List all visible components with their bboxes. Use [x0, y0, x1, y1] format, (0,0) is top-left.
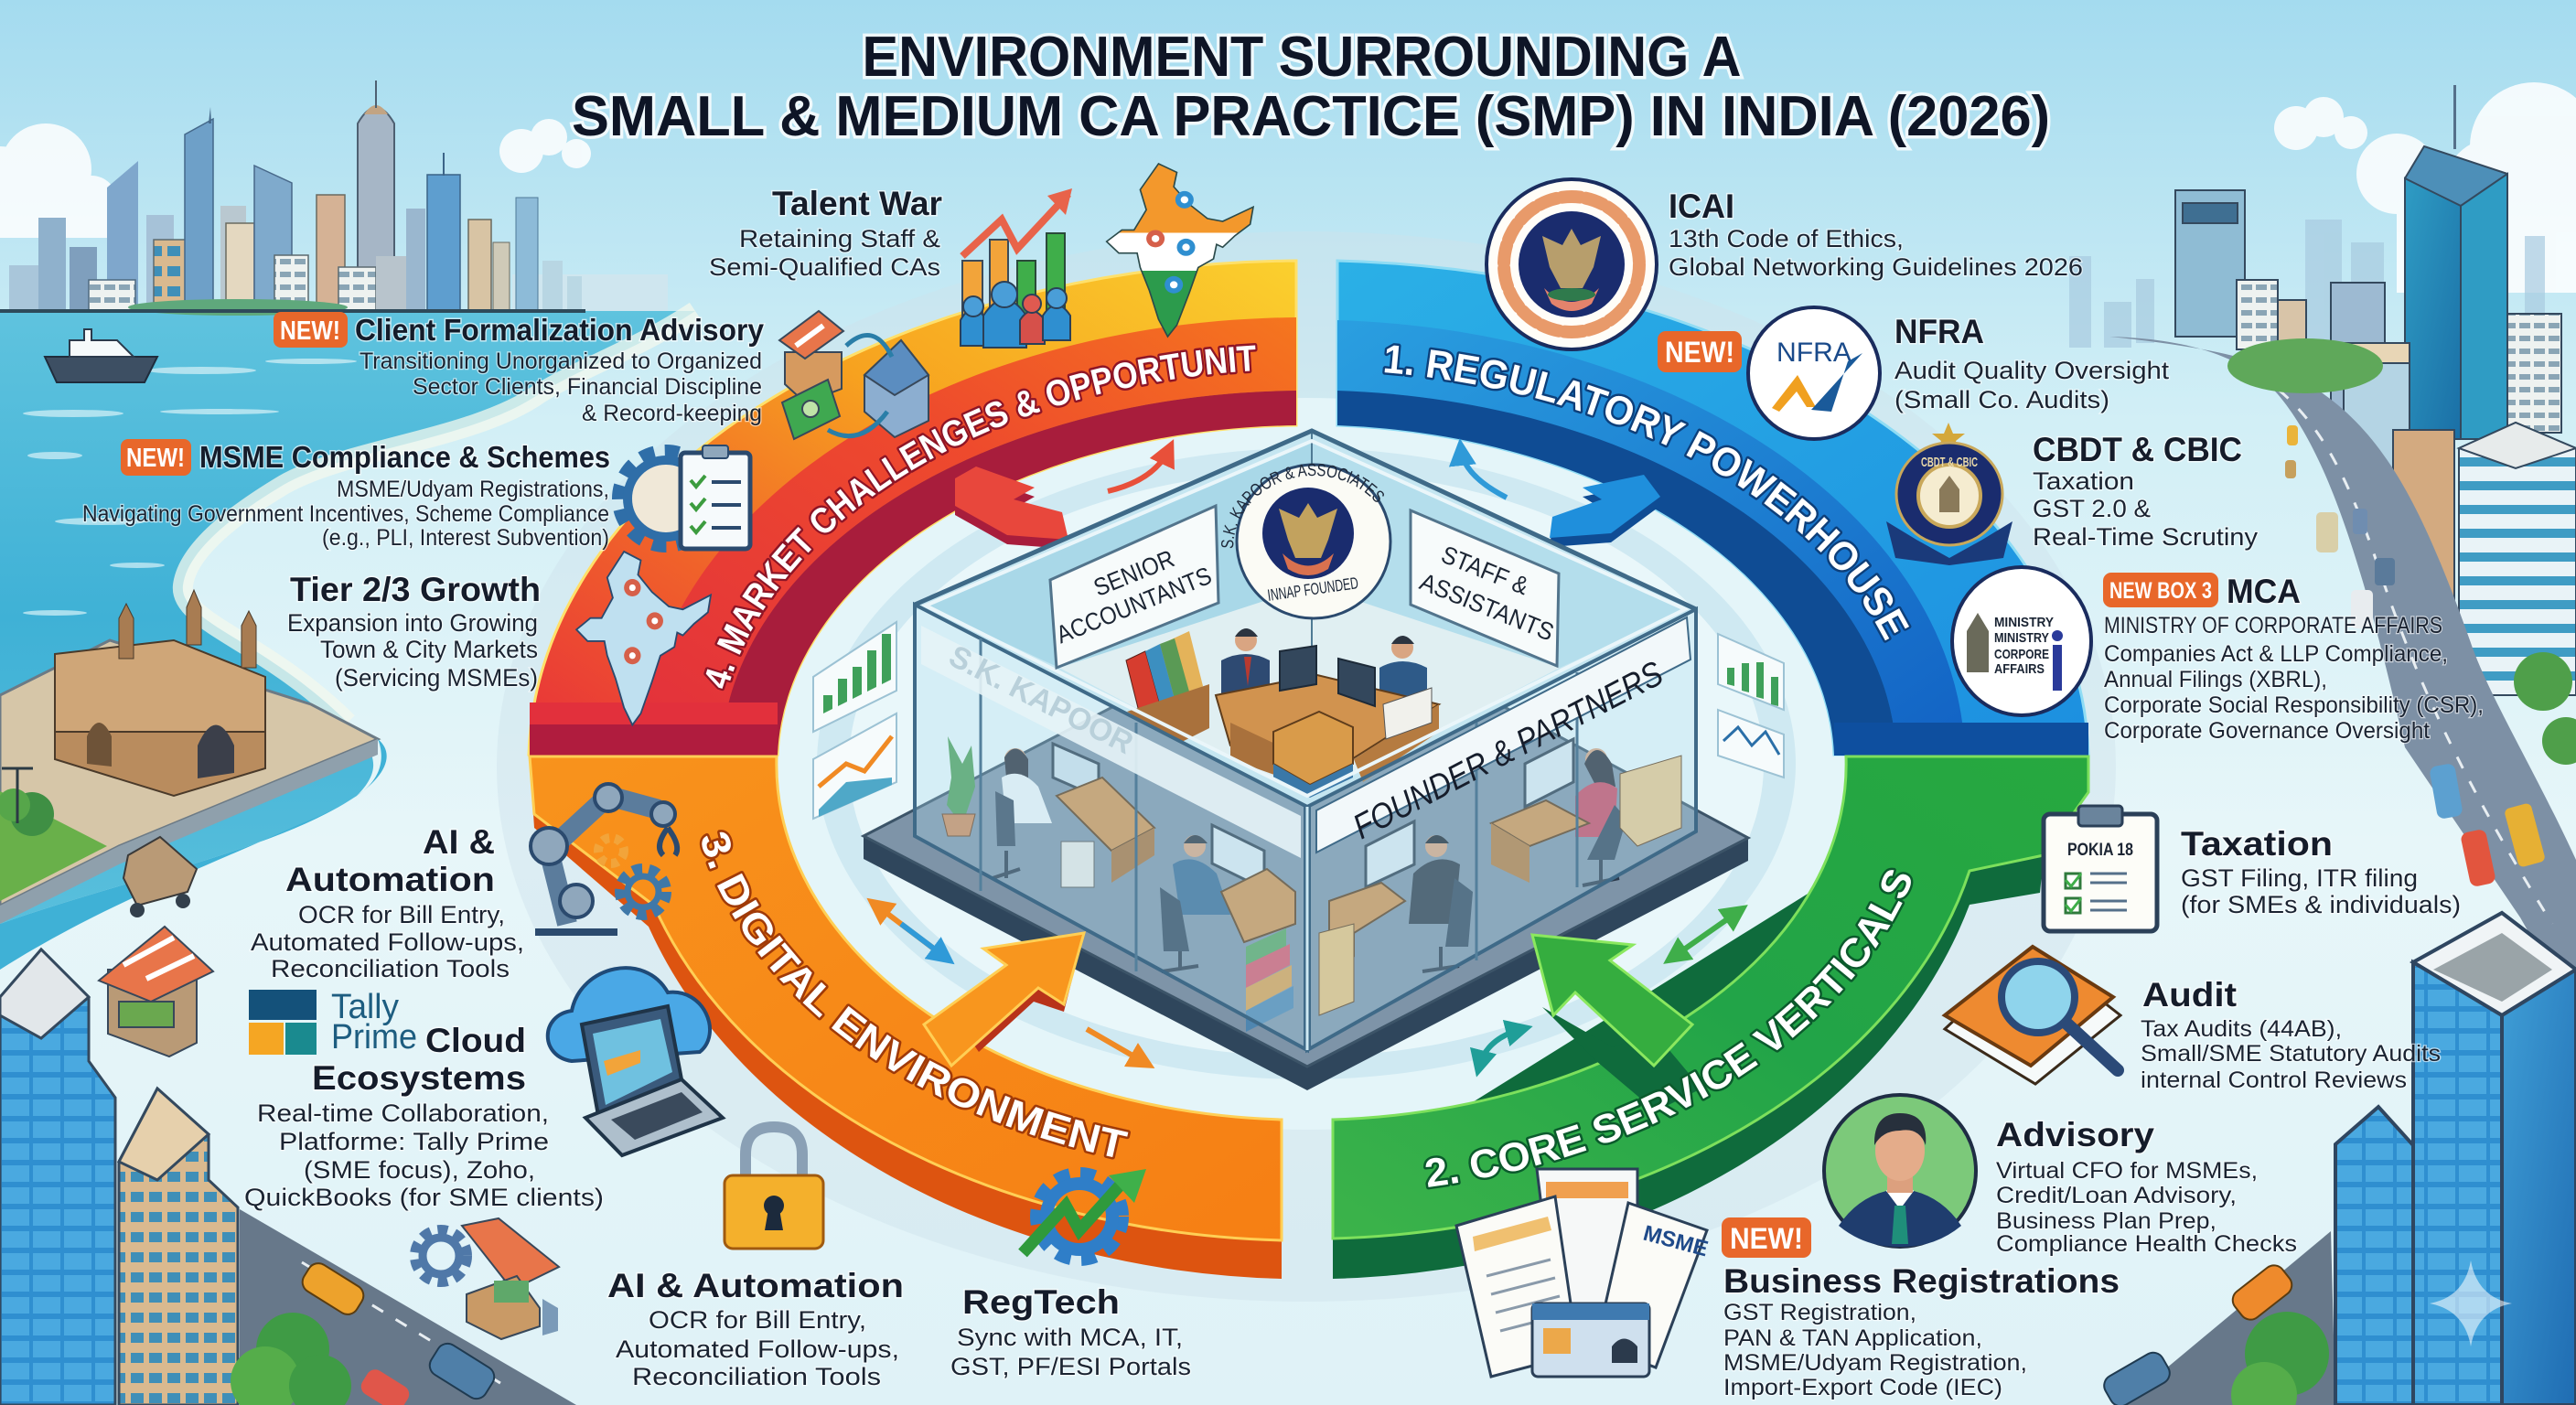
description: Annual Filings (XBRL), — [2104, 667, 2327, 692]
floating chart panels right — [1718, 634, 1784, 778]
heading: Ecosystems — [312, 1059, 526, 1097]
description — [2104, 613, 2484, 744]
left harbour sea — [0, 311, 695, 924]
description: MSME/Udyam Registrations, — [337, 477, 609, 502]
river channel — [0, 739, 387, 970]
icon: Ministry of Corporate Affairs logo: MINISTRY — [1994, 630, 2049, 646]
description: Expansion into Growing — [287, 609, 538, 637]
left city skyline — [0, 80, 668, 316]
description: PAN & TAN Application, — [1723, 1325, 1982, 1351]
description — [251, 901, 524, 982]
arrow: market to practice — [955, 467, 1068, 549]
heading — [312, 1022, 526, 1097]
right side road with cars — [2109, 337, 2576, 1015]
description: GST Filing, ITR filing — [2181, 864, 2418, 892]
description: Sync with MCA, IT, — [957, 1324, 1183, 1351]
text: MSME Compliance and Schemes — [82, 439, 610, 551]
heading: MCA — [2227, 573, 2301, 610]
sign: senior accountants: SENIOR — [1089, 545, 1178, 602]
description — [287, 609, 538, 692]
heading: AI & Automation — [607, 1267, 904, 1304]
text: ICAI — [1669, 188, 2083, 281]
description: QuickBooks (for SME clients) — [244, 1184, 604, 1211]
bottom left road with cars and trees — [231, 1209, 576, 1405]
text: NFRA — [1894, 313, 2170, 413]
text: Audit — [2141, 976, 2441, 1093]
icon: India map in tricolour with pins — [1107, 164, 1253, 337]
inner ring floor — [757, 398, 1855, 1130]
description: Retaining Staff & — [739, 225, 940, 252]
description: OCR for Bill Entry, — [649, 1306, 866, 1334]
icon: ICAI seal — [1487, 179, 1657, 349]
heading — [285, 823, 495, 898]
description: Automated Follow-ups, — [251, 928, 524, 956]
desks and back staff — [1126, 628, 1439, 798]
icon: registration documents and ID card — [1456, 1169, 1711, 1377]
icon: advisor portrait — [1824, 1095, 1976, 1247]
ring label: 2. Core Service Verticals: 2. CORE SERVICE VERTICALS — [1423, 867, 1914, 1189]
Gateway of India monument and waterfront — [0, 590, 378, 924]
description — [2033, 467, 2259, 551]
small flow arrows — [875, 449, 1739, 1067]
icon: registration documents and ID card: MSME — [1640, 1221, 1711, 1261]
icon: Tally logo: Prime — [331, 1018, 417, 1056]
front centre left desk — [1160, 825, 1295, 1032]
text: CBDT and CBIC — [2033, 431, 2259, 551]
text: Talent War — [709, 185, 942, 281]
right upper buildings — [2175, 85, 2576, 695]
description — [1894, 357, 2170, 413]
description — [2141, 1016, 2441, 1093]
right far skyline haze — [2069, 220, 2545, 357]
heading: MSME Compliance & Schemes — [199, 440, 610, 474]
arrow: digital environment to practice — [924, 933, 1084, 1066]
description — [82, 477, 609, 551]
arrow: core services to practice — [1532, 935, 1701, 1111]
description: Platforme: Tally Prime — [279, 1128, 549, 1155]
icon: padlock — [724, 1127, 823, 1249]
icon: Ministry of Corporate Affairs logo — [1952, 567, 2091, 715]
heading: ICAI — [1669, 188, 1734, 225]
ring segment 2: core service verticals (green) — [1333, 756, 2088, 1279]
heading: NFRA — [1894, 313, 1984, 350]
title: ENVIRONMENT SURROUNDING A — [862, 26, 1742, 89]
description — [360, 349, 762, 426]
description: internal Control Reviews — [2141, 1067, 2407, 1093]
description: Transitioning Unorganized to Organized — [360, 349, 762, 374]
heading: Audit — [2142, 976, 2237, 1014]
icon: Ministry of Corporate Affairs logo: CORPORE — [1994, 647, 2049, 662]
platform base — [864, 604, 1748, 1090]
ring segment 4: market challenges and opportunities (red to yellow) — [529, 261, 1296, 756]
badge: new NFRA: NEW! — [1665, 336, 1734, 369]
front left cubicle — [942, 736, 1154, 887]
description: (e.g., PLI, Interest Subvention) — [322, 525, 609, 551]
icon: growth chart with team — [961, 188, 1072, 348]
text: MCA — [2103, 573, 2484, 744]
icon: RegTech gear with arrow — [1023, 1169, 1146, 1257]
sign: staff and assistants — [1411, 510, 1559, 666]
description — [709, 225, 940, 281]
badge: new: NEW! — [280, 316, 340, 346]
text: RegTech — [950, 1283, 1191, 1380]
description: Reconciliation Tools — [271, 955, 510, 982]
description: GST 2.0 & — [2033, 495, 2151, 522]
description: Compliance Health Checks — [1996, 1231, 2297, 1257]
heading: CBDT & CBIC — [2033, 431, 2242, 468]
description: Corporate Social Responsibility (CSR), — [2104, 692, 2484, 718]
badge: new: NEW! — [126, 444, 185, 473]
beach shoreline — [183, 311, 695, 723]
icon: compliance checklist with gear — [620, 445, 750, 549]
ring floor shadow — [497, 231, 2116, 1302]
icon: NFRA logo — [1748, 307, 1880, 439]
description — [1723, 1300, 2027, 1400]
description — [1996, 1158, 2297, 1257]
sign: staff and assistants: ASSISTANTS — [1416, 568, 1558, 647]
description: & Record-keeping — [582, 401, 762, 426]
sparkle watermark — [2430, 1260, 2512, 1346]
icon: market stall left — [99, 927, 213, 1056]
ring label: 3. Digital Environment: 3. DIGITAL ENVIRONMENT — [699, 830, 1131, 1160]
description — [244, 1099, 604, 1211]
arrow: regulation to practice — [1550, 475, 1660, 547]
ring segment 1: regulatory powerhouse (blue) — [1337, 261, 2088, 756]
description: Companies Act & LLP Compliance, — [2104, 641, 2448, 667]
description — [950, 1324, 1191, 1380]
description: Real-Time Scrutiny — [2033, 523, 2259, 551]
description: (SME focus), Zoho, — [304, 1156, 535, 1184]
icon: gear and market stall bottom — [417, 1218, 559, 1339]
description: Town & City Markets — [320, 636, 538, 663]
description — [1669, 225, 2083, 281]
heading: Tier 2/3 Growth — [290, 571, 541, 608]
description: Taxation — [2033, 467, 2134, 495]
sign: senior accountants: ACCOUNTANTS — [1053, 562, 1216, 649]
description: Import-Export Code (IEC) — [1723, 1375, 2002, 1400]
glass front walls — [915, 431, 1696, 1050]
sea highlights — [23, 359, 357, 616]
text: Advisory — [1996, 1116, 2297, 1257]
description: GST Registration, — [1723, 1300, 1916, 1325]
central office building — [860, 428, 1751, 1090]
left wall banner with faint firm name — [921, 626, 1301, 858]
sign: senior accountants — [1050, 506, 1218, 668]
bottom right buildings and road — [2100, 913, 2576, 1405]
text: Tier 2/3 Growth — [287, 571, 541, 692]
description: Credit/Loan Advisory, — [1996, 1183, 2237, 1208]
icon: Tally logo: Tally — [331, 988, 399, 1026]
sign: staff and assistants: STAFF & — [1437, 541, 1532, 600]
description: Automated Follow-ups, — [616, 1335, 899, 1363]
description: Reconciliation Tools — [632, 1363, 881, 1390]
description: OCR for Bill Entry, — [298, 901, 505, 928]
heading: Cloud — [425, 1022, 526, 1059]
text: AI & Automation (lower) — [607, 1267, 904, 1390]
description: (Small Co. Audits) — [1894, 386, 2109, 413]
front centre right desk — [1319, 821, 1473, 1015]
icon: audit book and magnifier — [1945, 947, 2120, 1084]
description: Tax Audits (44AB), — [2141, 1016, 2342, 1042]
icon: cloud and laptop — [548, 968, 723, 1155]
icon: Ministry of Corporate Affairs logo: AFFAIRS — [1994, 661, 2045, 677]
bottom left buildings — [0, 949, 238, 1405]
heading: Client Formalization Advisory — [355, 313, 765, 347]
description: Semi-Qualified CAs — [709, 253, 940, 281]
icon: Ministry of Corporate Affairs logo: MINISTRY — [1994, 615, 2054, 630]
description: GST, PF/ESI Portals — [950, 1353, 1191, 1380]
text: AI & Automation (upper) — [251, 823, 524, 982]
title: SMALL & MEDIUM CA PRACTICE (SMP) IN INDIA (2026) — [572, 85, 2050, 148]
heading: Advisory — [1996, 1116, 2154, 1153]
badge: new box 3: NEW BOX 3 — [2109, 578, 2212, 604]
description: Virtual CFO for MSMEs, — [1996, 1158, 2258, 1184]
text: Cloud Ecosystems — [244, 1022, 604, 1211]
description — [616, 1306, 899, 1390]
description: Corporate Governance Oversight — [2104, 718, 2430, 744]
floating chart panels left — [813, 622, 896, 819]
rickshaw — [123, 837, 197, 917]
description: 13th Code of Ethics, — [1669, 225, 1904, 252]
description: (Servicing MSMEs) — [335, 664, 538, 692]
heading: Talent War — [772, 185, 942, 222]
icon: India map with red pins — [576, 552, 711, 725]
description: Business Plan Prep, — [1996, 1208, 2216, 1234]
icon: taxation clipboard: POKIA 18 — [2067, 841, 2133, 860]
firm seal: S.K. Kapoor & Associates: S.K. KAPOOR & ASSOCIATES — [1221, 463, 1384, 549]
heading: Taxation — [2181, 825, 2333, 863]
description: Navigating Government Incentives, Scheme Compliance — [82, 501, 609, 527]
icon: taxation clipboard — [2044, 806, 2157, 931]
description: MSME/Udyam Registration, — [1723, 1350, 2027, 1376]
description: Real-time Collaboration, — [257, 1099, 549, 1127]
clouds — [0, 82, 2576, 293]
front right cubicle — [1491, 739, 1681, 885]
description: MINISTRY OF CORPORATE AFFAIRS — [2104, 613, 2442, 638]
description: Sector Clients, Financial Discipline — [413, 374, 762, 400]
right wall banner: Founder and Partners: FOUNDER & PARTNERS — [1347, 655, 1669, 847]
text: Business Registrations — [1722, 1217, 2120, 1400]
description: (for SMEs & individuals) — [2181, 891, 2461, 918]
text: Client Formalization Advisory — [274, 312, 765, 426]
description: Small/SME Statutory Audits — [2141, 1041, 2441, 1067]
heading: RegTech — [962, 1283, 1120, 1321]
badge: new: NEW! — [1730, 1222, 1803, 1255]
ring segment 3: digital environment (orange) — [530, 756, 1282, 1279]
text: Taxation — [2181, 825, 2461, 918]
description — [2181, 864, 2461, 918]
description: Global Networking Guidelines 2026 — [1669, 253, 2083, 281]
heading: Automation — [285, 861, 495, 898]
title — [572, 26, 2050, 148]
icon: NFRA logo: NFRA — [1776, 338, 1852, 368]
ring label: 1. Regulatory Powerhouse: 1. REGULATORY POWERHOUSE — [1382, 343, 1912, 643]
description: Audit Quality Oversight — [1894, 357, 2170, 384]
firm seal: S.K. Kapoor & Associates: INNAP FOUNDED — [1266, 574, 1359, 605]
heading: AI & — [423, 823, 495, 861]
left wall banner with faint firm name: S.K. KAPOOR — [943, 638, 1139, 761]
icon: CBDT and CBIC emblem — [1886, 423, 2012, 565]
heading: Business Registrations — [1723, 1262, 2120, 1300]
badge: new — [121, 439, 191, 476]
firm seal: S.K. Kapoor & Associates — [1221, 463, 1392, 620]
icon: robot arm with gears — [531, 784, 677, 936]
icon: Tally logo — [249, 988, 417, 1056]
icon: market stall, bank and money — [779, 311, 928, 439]
ship — [45, 329, 157, 382]
icon: CBDT and CBIC emblem: CBDT & CBIC — [1921, 455, 1978, 470]
badge: new box 3 — [2103, 573, 2218, 607]
interior glass back walls — [915, 431, 1696, 807]
